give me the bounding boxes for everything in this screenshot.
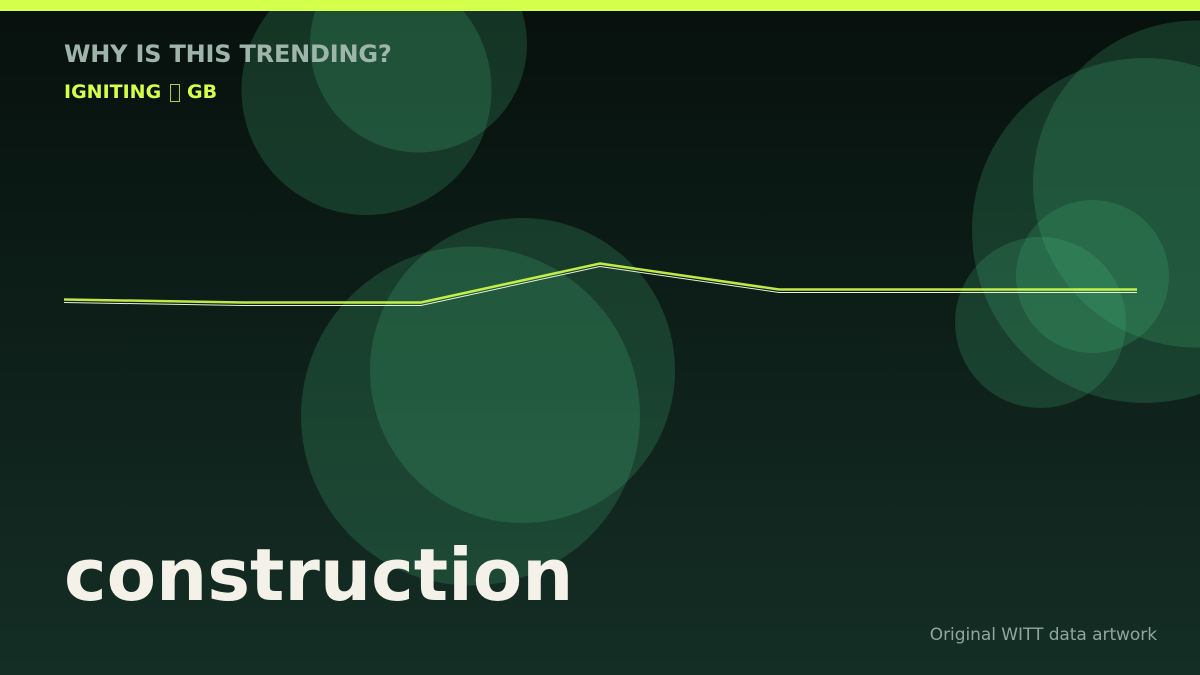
- subheading: [64, 81, 217, 103]
- circle cluster: top: [242, 0, 527, 215]
- circle cluster: centre: [301, 218, 675, 586]
- series shadow line: [64, 266, 1137, 306]
- main title: construction: [64, 533, 573, 617]
- icon: missing glyph box: [170, 84, 180, 102]
- subheading: IGNITING: [64, 81, 161, 103]
- heading: WHY IS THIS TRENDING?: [64, 40, 392, 68]
- credit: Original WITT data artwork: [930, 625, 1157, 645]
- top accent bar: [0, 0, 1200, 11]
- series main line: [64, 264, 1137, 302]
- circle cluster: right: [955, 20, 1200, 408]
- subheading: GB: [187, 81, 217, 103]
- line chart: [64, 264, 1137, 306]
